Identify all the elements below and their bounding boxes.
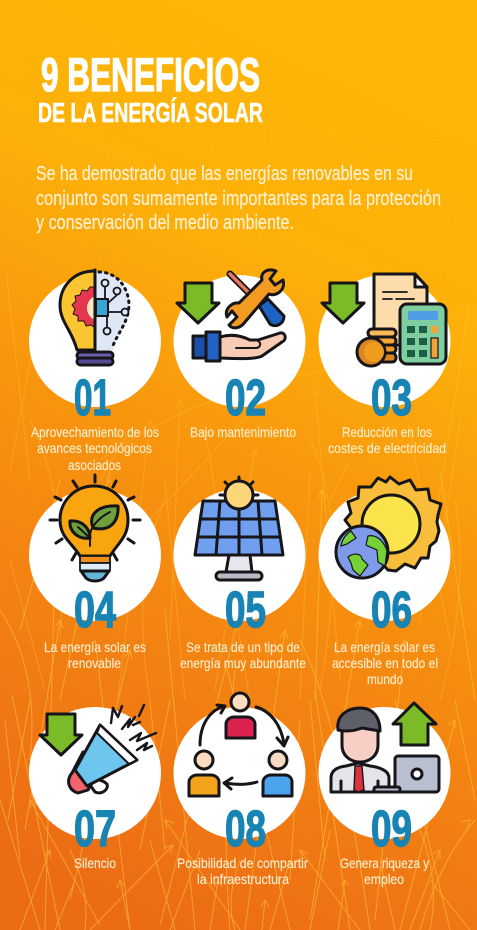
caption 04: La energía solar es: [44, 639, 146, 655]
icon: laptop: [374, 756, 439, 792]
number 03: 03: [371, 369, 412, 426]
number 07: 07: [74, 800, 116, 857]
panel: benefit 04: [29, 475, 161, 671]
icon: up arrow: [393, 703, 436, 745]
icon: document: [374, 274, 427, 345]
panel: benefit 09: [318, 703, 450, 887]
panel: benefit 02: [174, 270, 306, 440]
caption 05: [180, 639, 306, 671]
icon: down arrow: [40, 714, 82, 755]
caption 01: asociados: [68, 457, 121, 473]
caption 08: la infraestructura: [197, 871, 289, 887]
panel: benefit 01: [29, 270, 161, 473]
intro paragraph: y conservación del medio ambiente.: [36, 212, 294, 234]
icon: three people sharing in a cycle: [189, 693, 292, 796]
icon: megaphone: [69, 705, 156, 793]
caption 09: [340, 855, 429, 887]
icon: down arrow: [322, 283, 364, 323]
icon: open hand with blue cuff: [193, 332, 285, 361]
caption 01: Aprovechamiento de los: [31, 424, 159, 440]
caption 02: Bajo mantenimiento: [190, 424, 296, 440]
caption 09: Genera riqueza y: [340, 855, 429, 871]
panel: benefit 06: [318, 477, 450, 687]
icon: wrench and screwdriver: [226, 270, 284, 328]
intro paragraph: [36, 163, 441, 234]
caption 09: empleo: [364, 871, 404, 887]
caption 06: mundo: [367, 671, 403, 687]
icon: down arrow: [177, 283, 219, 323]
number 09: 09: [371, 800, 412, 857]
caption 01: avances tecnológicos: [37, 440, 152, 456]
caption 04: [44, 639, 146, 671]
icon: half gear half circuit light bulb: [60, 270, 130, 365]
icon: businessman: [331, 708, 389, 792]
caption 01: [31, 424, 159, 473]
icon: light bulb with plant: [50, 475, 140, 581]
caption 06: [332, 639, 438, 687]
title: DE LA ENERGÍA SOLAR: [38, 97, 263, 128]
panel: benefit 05: [174, 477, 306, 671]
panel: benefit 07: [29, 705, 161, 871]
number 04: 04: [74, 581, 116, 638]
icon: coins: [357, 329, 396, 366]
caption 05: Se trata de un tipo de: [186, 639, 300, 655]
caption 08: [177, 855, 308, 887]
panel: benefit 03: [318, 274, 450, 456]
title: 9 BENEFICIOS: [41, 48, 260, 101]
icon: solar panel with sun: [195, 477, 283, 580]
number 05: 05: [225, 581, 266, 638]
number 01: 01: [74, 369, 111, 426]
title: [38, 48, 263, 128]
caption 07: Silencio: [74, 855, 116, 871]
icon: calculator: [400, 304, 446, 364]
caption 06: accesible en todo el: [332, 655, 438, 671]
caption 04: renovable: [68, 655, 121, 671]
caption 03: costes de electricidad: [328, 440, 446, 456]
caption 06: La energía solar es: [334, 639, 435, 655]
panel: benefit 08: [174, 693, 308, 887]
caption 03: Reducción en los: [342, 424, 432, 440]
caption 05: energía muy abundante: [180, 655, 306, 671]
caption 08: Posibilidad de compartir: [177, 855, 308, 871]
icon: globe: [336, 526, 388, 578]
number 08: 08: [225, 800, 266, 857]
number 02: 02: [225, 369, 266, 426]
caption 03: [328, 424, 446, 456]
icon: sun: [345, 477, 441, 571]
number 06: 06: [371, 581, 412, 638]
